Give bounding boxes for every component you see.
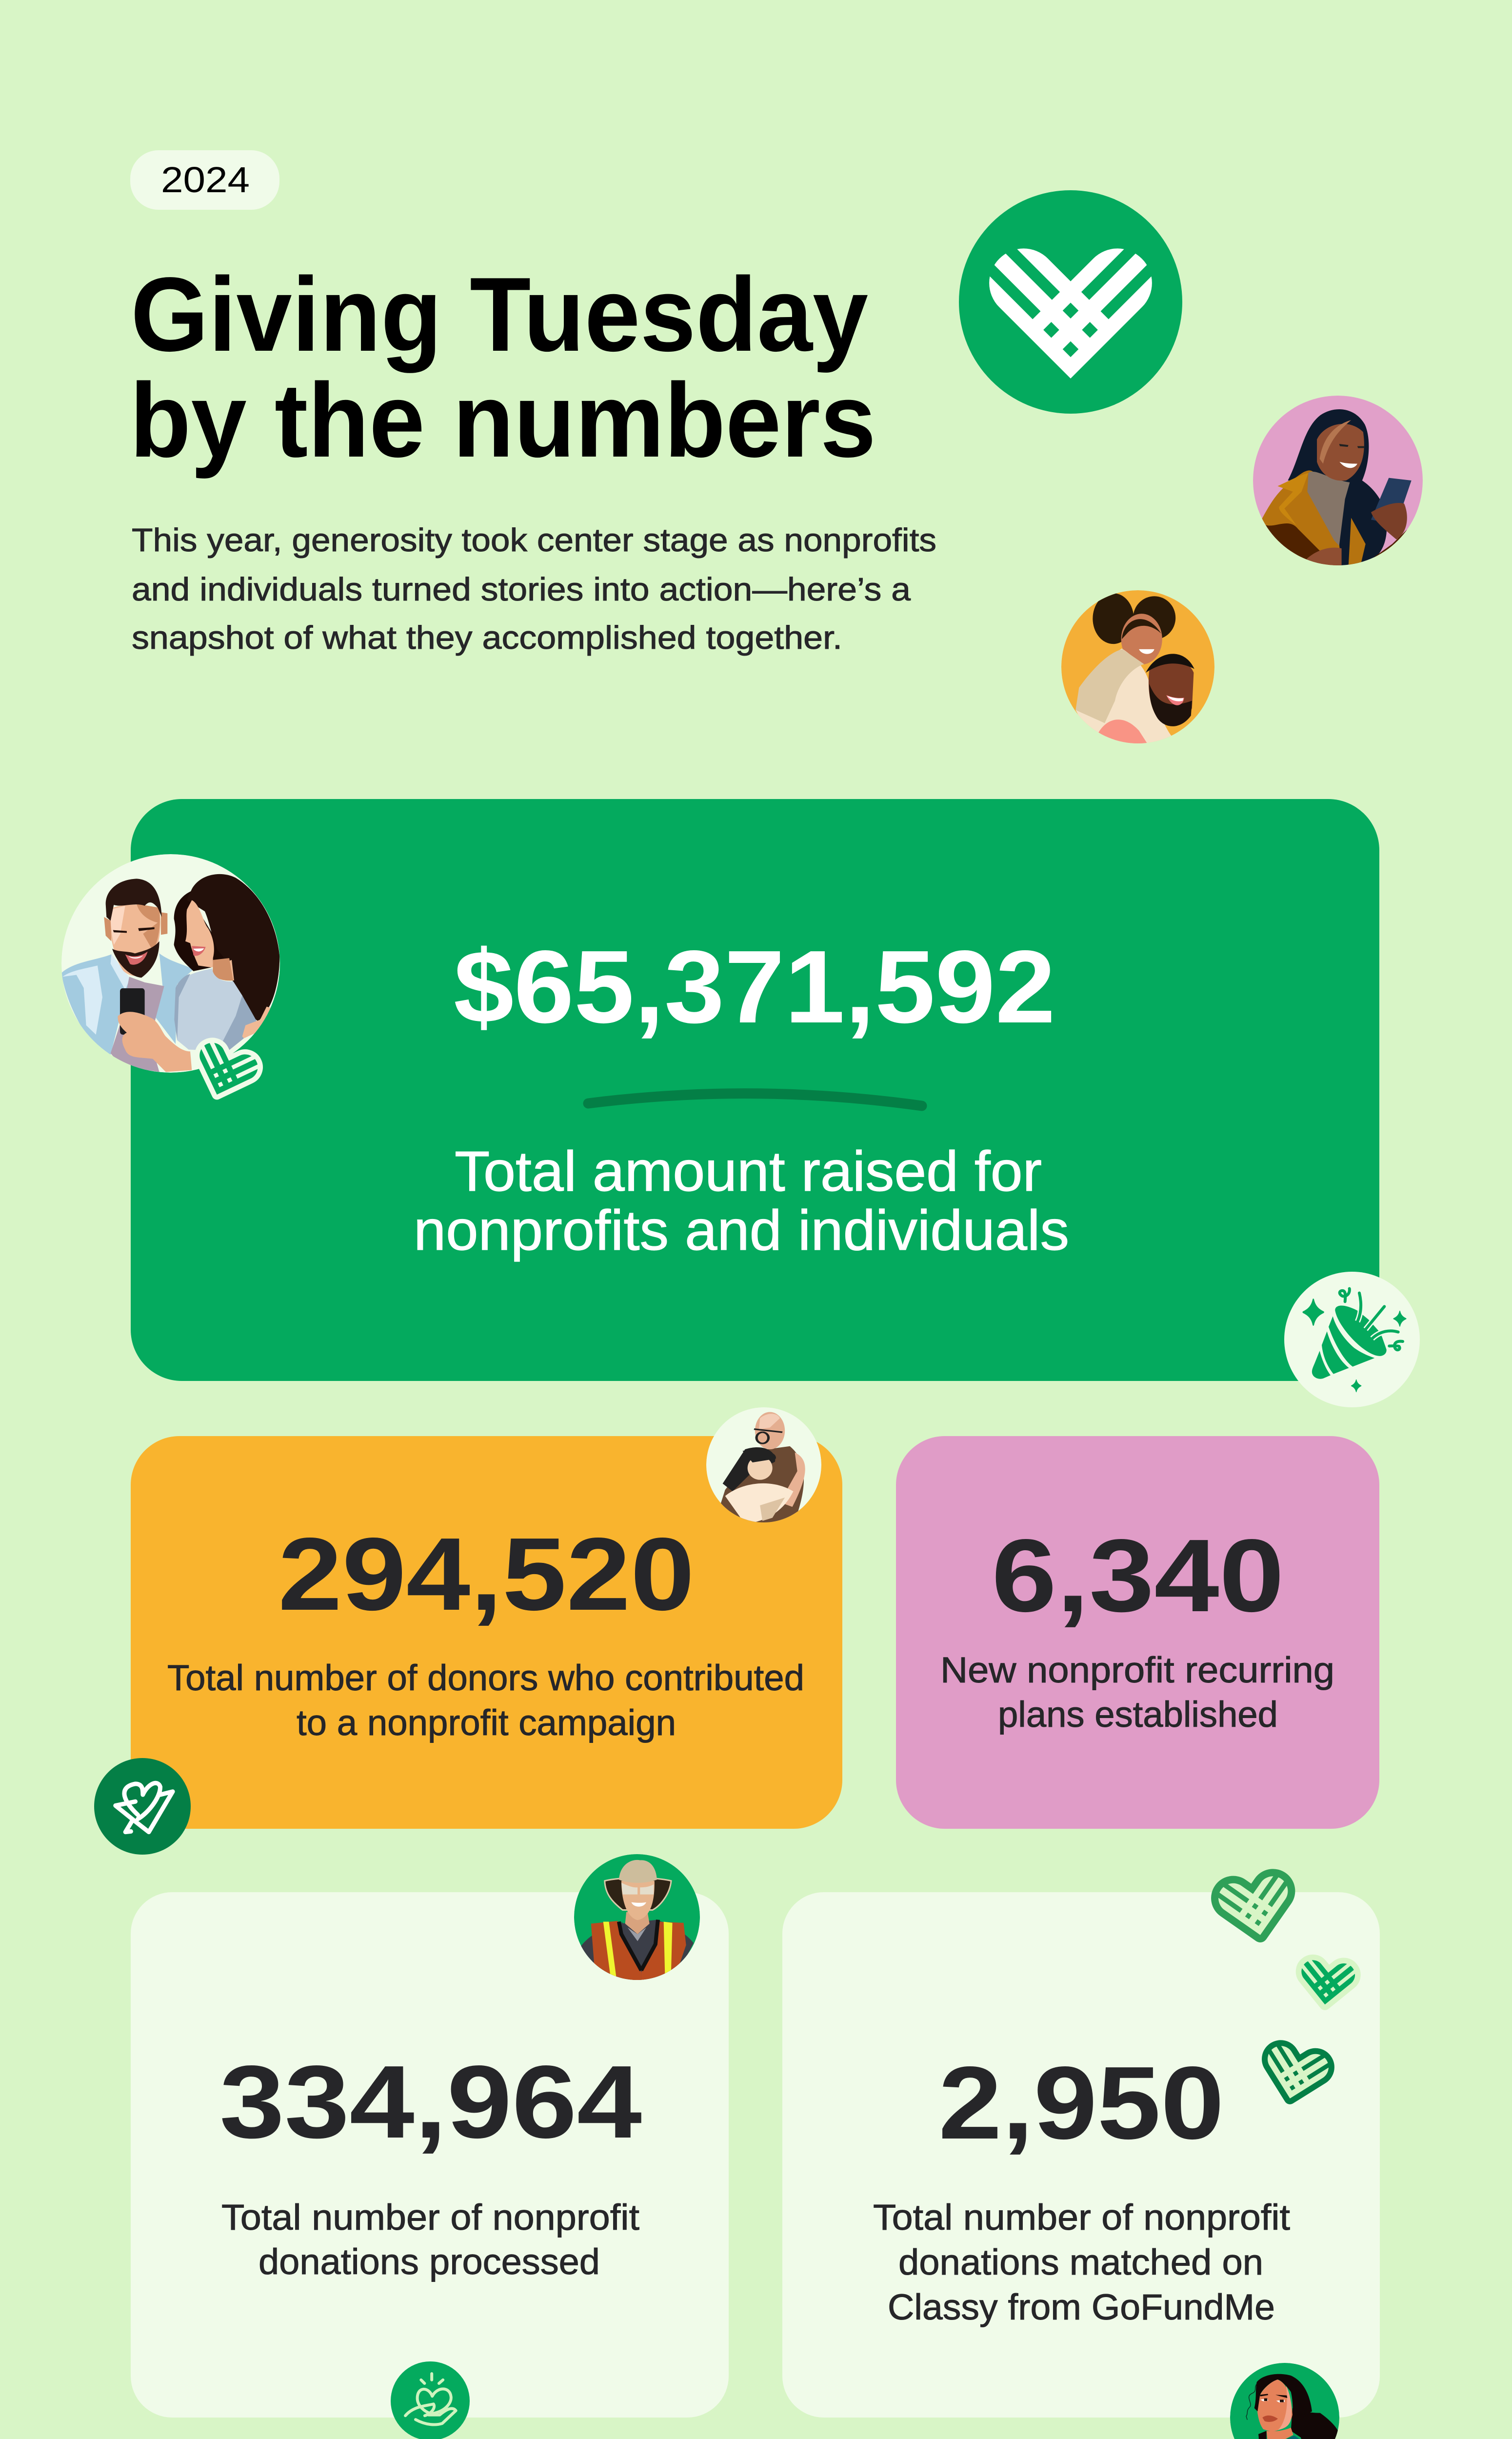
- panel: donors: [131, 1436, 842, 1829]
- donations processed caption: donations processed: [259, 2241, 600, 2282]
- donations matched caption: donations matched on: [898, 2242, 1263, 2282]
- intro paragraph: [132, 522, 936, 656]
- donors caption: [167, 1658, 804, 1743]
- panel: recurring plans: [896, 1436, 1379, 1829]
- panel: donations matched: [782, 1892, 1380, 2418]
- divider swoosh: [588, 1094, 922, 1106]
- recurring plans figure: 6,340: [992, 1518, 1284, 1633]
- icon: badge heart on couple: [182, 1013, 277, 1107]
- donations matched caption: Classy from GoFundMe: [888, 2287, 1275, 2327]
- icon: heart in hand: [391, 2361, 470, 2439]
- donations processed caption: [221, 2197, 639, 2282]
- panel: total raised: [131, 799, 1379, 1381]
- portrait: man hugging woman: [706, 1407, 821, 1524]
- portrait: woman with curly hair: [1230, 2363, 1339, 2439]
- icon: party popper: [1284, 1272, 1420, 1407]
- recurring plans caption: plans established: [998, 1694, 1278, 1735]
- total amount caption: [414, 1140, 1069, 1262]
- portrait: woman with phone: [1253, 396, 1423, 568]
- donors figure: 294,520: [278, 1516, 695, 1632]
- intro paragraph: and individuals turned stories into action—here’s a: [132, 571, 911, 608]
- total amount figure: $65,371,592: [454, 929, 1055, 1044]
- icon: Giving Tuesday heart logo: [959, 179, 1182, 414]
- portrait: couple with phone: [61, 854, 280, 1073]
- icon: heart one: [1203, 1843, 1303, 1942]
- total amount caption: nonprofits and individuals: [414, 1199, 1069, 1262]
- intro paragraph: snapshot of what they accomplished together.: [132, 620, 842, 656]
- title: Giving Tuesday: [131, 255, 868, 373]
- icon: heart and check on dark circle: [94, 1758, 191, 1855]
- donors caption: Total number of donors who contributed: [167, 1658, 804, 1698]
- recurring plans caption: [940, 1650, 1334, 1735]
- icon: heart two: [1292, 1936, 1365, 2008]
- year pill: 2024: [161, 160, 250, 200]
- recurring plans caption: New nonprofit recurring: [940, 1650, 1334, 1690]
- panel: donations processed: [131, 1892, 729, 2418]
- total amount caption: Total amount raised for: [455, 1140, 1042, 1203]
- donations matched caption: Total number of nonprofit: [873, 2197, 1290, 2238]
- donations matched caption: [873, 2197, 1290, 2327]
- intro paragraph: This year, generosity took center stage as nonprofits: [132, 522, 936, 559]
- portrait: father and daughter: [1061, 590, 1214, 745]
- year pill: [130, 150, 279, 210]
- donations processed figure: 334,964: [219, 2044, 642, 2159]
- portrait: man in hat and safety vest: [574, 1854, 700, 1984]
- donations matched figure: 2,950: [938, 2045, 1224, 2160]
- donors caption: to a nonprofit campaign: [297, 1702, 676, 1743]
- donations processed caption: Total number of nonprofit: [221, 2197, 639, 2238]
- title: by the numbers: [130, 361, 876, 479]
- title: [130, 255, 876, 479]
- icon: heart three: [1253, 2016, 1344, 2107]
